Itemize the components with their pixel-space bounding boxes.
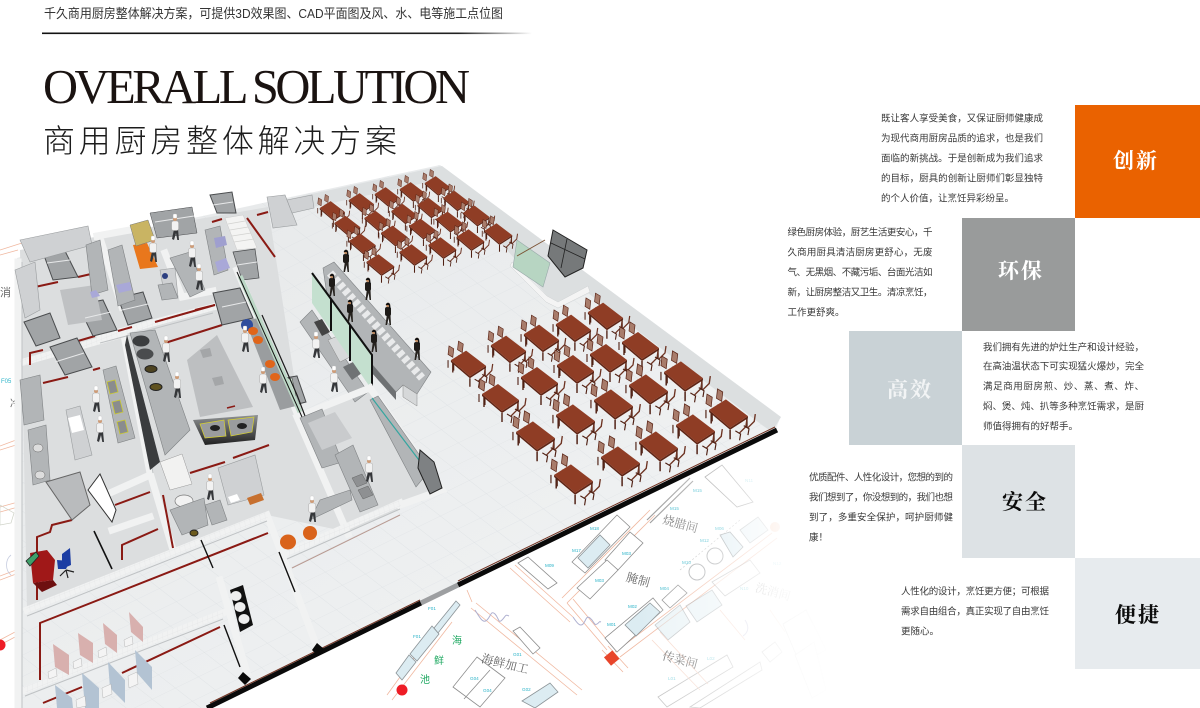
plan room: marinating and roast rooms: M06 bbox=[715, 526, 724, 531]
safety copy: 康！ bbox=[809, 532, 828, 544]
safety copy bbox=[809, 472, 953, 544]
cooking line behind the glass bbox=[273, 310, 368, 408]
plan room: marinating and roast rooms: M02 bbox=[628, 604, 637, 609]
plan room: marinating and roast rooms: M04 bbox=[660, 586, 669, 591]
title: OVERALL SOLUTION: OVERALL SOLUTION bbox=[43, 61, 470, 114]
cold room and storage units bbox=[15, 192, 314, 375]
environmental copy: 久商用厨具清洁厨房更舒心，无废 bbox=[788, 246, 933, 258]
efficiency copy: 我们拥有先进的炉灶生产和设计经验， bbox=[983, 342, 1144, 354]
plan room: marinating and roast rooms: M09 bbox=[545, 563, 554, 568]
efficiency copy bbox=[983, 342, 1144, 432]
floor slab bbox=[17, 165, 780, 708]
plan room: marinating and roast rooms: 洗消间 bbox=[754, 579, 793, 604]
convenience tile bbox=[1075, 558, 1200, 669]
environmental copy bbox=[788, 226, 933, 318]
safety copy: 优质配件、人性化设计，您想的到的 bbox=[809, 472, 953, 484]
kitchen lower room equipment bbox=[160, 396, 442, 550]
plan room: seafood processing: 海 bbox=[452, 634, 462, 647]
efficiency copy: 师值得拥有的好帮手。 bbox=[983, 420, 1078, 432]
efficiency tile bbox=[849, 331, 962, 445]
left edge plan fragments: 消 bbox=[0, 285, 11, 299]
plan room: marinating and roast rooms: 腌制 bbox=[624, 568, 652, 591]
plan room: marinating and roast rooms: M03 bbox=[622, 551, 631, 556]
feature: innovation bbox=[881, 105, 1200, 218]
plan room: dish washing and serving: N11 bbox=[745, 478, 754, 483]
hot kitchen stove line and island bbox=[125, 330, 258, 470]
innovation copy: 面临的新挑战。于是创新成为我们追求 bbox=[881, 152, 1043, 164]
serving counter with glass partition bbox=[312, 262, 431, 406]
convenience copy: 需求自由组合，真正实现了自由烹饪 bbox=[901, 606, 1049, 618]
dining tables, upper group bbox=[318, 169, 518, 284]
innovation tile bbox=[1075, 105, 1200, 218]
plan room: seafood processing: G04 bbox=[483, 688, 492, 693]
efficiency copy: 在高油温状态下可实现猛火爆炒，完全 bbox=[983, 360, 1144, 372]
plan room: seafood processing: F01 bbox=[428, 606, 436, 611]
plan room: seafood processing: F01 bbox=[413, 634, 421, 639]
plan room: marinating and roast rooms bbox=[510, 465, 793, 672]
prep table with orange containers bbox=[237, 272, 305, 417]
plan room: seafood processing: 海鲜加工 bbox=[480, 649, 530, 678]
innovation copy: 为现代商用厨房品质的追求，也是我们 bbox=[881, 132, 1043, 144]
dining tables, lower group bbox=[448, 293, 755, 505]
efficiency copy: 满足商用厨房煎、炒、蒸、煮、炸、 bbox=[983, 380, 1144, 392]
feature: convenience bbox=[901, 558, 1200, 669]
plan room: seafood processing: G04 bbox=[470, 676, 479, 681]
plan room: seafood processing: G02 bbox=[522, 687, 531, 692]
header rule bbox=[42, 32, 532, 34]
innovation copy: 的目标，厨具的创新让厨师们彰显独特 bbox=[881, 172, 1043, 184]
efficiency label: 高效 bbox=[887, 374, 933, 404]
plan room: dish washing and serving: N12 bbox=[773, 561, 782, 566]
header caption: 千久商用厨房整体解决方案，可提供3D效果图、CAD平面图及风、水、电等施工点位图 bbox=[44, 6, 503, 21]
plan room: seafood processing: 鲜 bbox=[434, 654, 444, 667]
plan room: marinating and roast rooms: M17 bbox=[572, 548, 581, 553]
environmental tile bbox=[962, 218, 1075, 331]
blueprint background: CAD floor plan bbox=[0, 243, 830, 708]
plan room: marinating and roast rooms: M01 bbox=[607, 622, 616, 627]
environmental copy: 工作更舒爽。 bbox=[788, 306, 845, 318]
safety label: 安全 bbox=[1002, 486, 1048, 516]
plan room: marinating and roast rooms: M12 bbox=[700, 538, 709, 543]
plan room: marinating and roast rooms: M15 bbox=[693, 488, 702, 493]
environmental label: 环保 bbox=[998, 255, 1044, 285]
efficiency copy: 焖、煲、炖、扒等多种烹饪需求，是厨 bbox=[983, 400, 1144, 412]
prep area with orange crates bbox=[90, 220, 230, 306]
plan room: dish washing and serving: N10 bbox=[740, 586, 749, 591]
plan room: marinating and roast rooms: 烧腊间 bbox=[661, 511, 700, 536]
plan room: dish washing and serving: L02 bbox=[707, 656, 715, 661]
safety copy: 我们想到了，你没想到的，我们也想 bbox=[809, 492, 953, 504]
innovation label: 创新 bbox=[1113, 145, 1159, 175]
convenience copy: 更随心。 bbox=[901, 626, 939, 638]
environmental copy: 新，让厨房整洁又卫生。清凉烹饪， bbox=[788, 286, 932, 298]
restroom cubicle partitions bbox=[48, 612, 152, 708]
dining outer wall with window bay bbox=[270, 166, 781, 432]
plan room: seafood processing: 池 bbox=[420, 673, 430, 686]
convenience label: 便捷 bbox=[1115, 599, 1161, 629]
left edge plan fragments bbox=[0, 243, 22, 650]
innovation copy: 的个人价值，让烹饪异彩纷呈。 bbox=[881, 192, 1014, 204]
plan room: seafood processing: G01 bbox=[513, 652, 522, 657]
convenience copy: 人性化的设计，烹饪更方便；可根据 bbox=[901, 586, 1049, 598]
safety copy: 到了，多重安全保护，呵护厨师健 bbox=[809, 512, 953, 524]
convenience copy bbox=[901, 586, 1049, 638]
plan room: seafood processing bbox=[387, 590, 582, 708]
innovation copy: 既让客人享受美食，又保证厨师健康成 bbox=[881, 112, 1043, 124]
plan room: dish washing and serving: L01 bbox=[668, 676, 676, 681]
safety tile bbox=[962, 445, 1075, 558]
environmental copy: 气、无黑烟、不藏污垢、台面光洁如 bbox=[788, 266, 932, 278]
plan room: marinating and roast rooms: M03 bbox=[595, 578, 604, 583]
feature: environmental bbox=[788, 218, 1075, 331]
black floor edge bbox=[207, 427, 777, 708]
kitchen partition walls bbox=[18, 230, 442, 708]
plan room: marinating and roast rooms: 传菜间 bbox=[661, 647, 700, 672]
red wall trim bbox=[30, 212, 400, 703]
feature: safety bbox=[809, 445, 1075, 558]
wash basin bank bbox=[201, 540, 295, 667]
3D kitchen and dining floor plan bbox=[15, 165, 781, 708]
innovation copy bbox=[881, 112, 1043, 204]
plan room: marinating and roast rooms: M15 bbox=[670, 506, 679, 511]
reception desk with chair bbox=[26, 548, 74, 592]
left edge plan fragments: F05 bbox=[1, 379, 12, 385]
serving staff bbox=[329, 250, 420, 360]
plan room: marinating and roast rooms: M10 bbox=[682, 560, 691, 565]
environmental copy: 绿色厨房体验，厨艺生活更安心，千 bbox=[788, 226, 933, 238]
plan room: marinating and roast rooms: M18 bbox=[590, 526, 599, 531]
cold prep room: left workstations bbox=[20, 366, 135, 569]
blueprint right fade bbox=[640, 440, 830, 708]
subtitle: 商用厨房整体解决方案 bbox=[43, 123, 397, 159]
plan room: dish washing and serving bbox=[652, 478, 826, 708]
kitchen staff: chefs bbox=[93, 214, 373, 522]
left edge plan fragments: 冷 bbox=[10, 397, 20, 410]
feature: efficiency bbox=[849, 331, 1144, 445]
staircase bbox=[225, 215, 257, 250]
